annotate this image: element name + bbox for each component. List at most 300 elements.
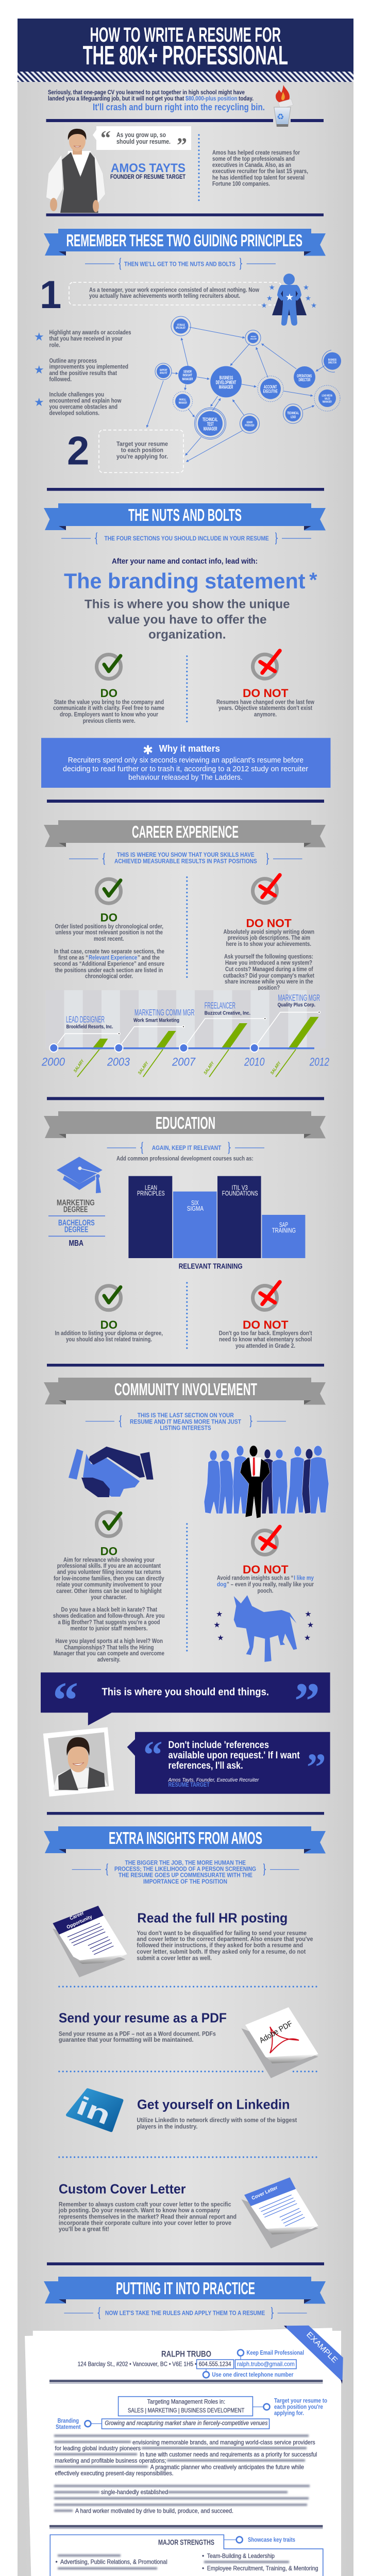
salary slashes: SALARY	[269, 1060, 282, 1075]
icon: Adobe PDF document: Adobe PDF	[258, 2019, 294, 2045]
node: payroll manager	[173, 392, 193, 411]
job: freelancer: Buzzcut Creative, Inc.	[205, 1010, 250, 1016]
bar: ITIL V3 foundations	[217, 1176, 261, 1258]
node: senior producer: PRODUCER	[245, 424, 255, 427]
subheading: nuts and bolts	[85, 258, 276, 269]
job: freelancer: FREELANCER	[205, 1001, 235, 1011]
tip: send as PDF	[59, 2010, 227, 2043]
text block: Amos bio: some of the top professionals and	[212, 155, 295, 162]
do: community involvement: DO	[100, 1545, 117, 1557]
node: support analyst	[155, 363, 172, 380]
major strengths box: •	[202, 2565, 204, 2572]
job: marketing manager	[278, 993, 320, 1008]
tip: get on LinkedIn: players in the industry.	[137, 2123, 197, 2130]
subheading: last section: THIS IS THE LAST SECTION ON YOUR	[138, 1412, 234, 1419]
person silhouette: far right	[309, 1446, 329, 1514]
quote banner: end things: This is where you should end things.	[102, 1687, 269, 1698]
intro text: today.	[239, 95, 254, 102]
subheading: measurable results	[69, 851, 302, 865]
subheading: keep it relevant: AGAIN, KEEP IT RELEVANT	[152, 1144, 222, 1151]
do not: career experience: DO NOT	[246, 917, 292, 929]
timeline years: 2003	[107, 1055, 130, 1068]
do not: community involvement: DO NOT	[243, 1563, 289, 1576]
node: technical test manager: MANAGER	[204, 427, 217, 432]
callout: principle 2	[99, 430, 183, 472]
targeting box: applying for.	[274, 2409, 304, 2416]
list: degrees: DEGREE	[63, 1206, 88, 1214]
do: career experience: In that case, create two separate sections, the	[54, 947, 164, 955]
do not: education	[219, 1282, 312, 1349]
banner: community involvement: COMMUNITY INVOLVEMENT	[114, 1380, 257, 1399]
node: project manager: PROJECT	[251, 335, 257, 337]
node: senior producer	[240, 414, 260, 433]
timeline years	[41, 1055, 329, 1068]
chart: job network diagram	[147, 316, 341, 462]
do: career experience: DO	[100, 911, 117, 924]
subheading: apply the rules	[64, 2308, 307, 2319]
banner: education	[44, 1111, 326, 1139]
icon: cover letter document: Cover Letter	[251, 2185, 279, 2201]
job: lead designer: LEAD DESIGNER	[66, 1014, 105, 1025]
do not: community involvement: dog	[217, 1581, 227, 1588]
quote box: references: references, I'll ask.	[168, 1760, 243, 1771]
banner: extra insights: EXTRA INSIGHTS FROM AMOS	[109, 1828, 262, 1848]
job: marketing comm manager	[133, 1007, 195, 1023]
do: career experience: second as “Additional Experience” and ensure	[54, 960, 164, 968]
node: business development manager: DEVELOPMENT	[216, 380, 236, 386]
icon: graduation cap	[57, 1157, 103, 1193]
icon: burning recycling bin	[274, 85, 293, 127]
photo: polaroid of Amos	[43, 1727, 114, 1797]
intro text	[48, 89, 265, 112]
tip: read the HR posting: submit a cover letter as well.	[137, 1954, 212, 1961]
resume contact line: 124 Barclay St., #202 • Vancouver, BC • V6E 1H5 •	[78, 2361, 197, 2368]
subheading: four sections: THE FOUR SECTIONS YOU SHOULD INCLUDE IN YOUR RESUME	[104, 535, 269, 542]
callout: direct telephone number: Use one direct telephone number	[212, 2371, 294, 2378]
node: senior insight manager	[178, 366, 197, 384]
icon: LinkedIn logo	[68, 2090, 122, 2130]
callout: principle 1: As a teenager, your work experience consisted of almost nothing. Now	[89, 286, 260, 294]
banner: career experience	[44, 820, 326, 847]
summary paragraph: A hard worker motivated by drive to build, produce, and succeed.	[75, 2507, 233, 2514]
salary slashes: SALARY	[72, 1058, 85, 1073]
node: operations director	[294, 366, 315, 388]
bar: six sigma: SIGMA	[187, 1205, 204, 1212]
list: achievement bullets: improvements you implemented	[49, 363, 128, 370]
summary paragraph: for leading global industry pioneers	[55, 2445, 141, 2452]
subheading: measurable results: ACHIEVED MEASURABLE RESULTS IN PAST POSITIONS	[114, 857, 257, 865]
quote box: references: ”	[307, 1746, 326, 1789]
back sheet	[25, 2328, 348, 2576]
person silhouette: left woman	[204, 1450, 224, 1514]
subheading: last section: RESUME AND IT MEANS MORE THAN JUST	[130, 1418, 242, 1425]
text block: Amos bio: Amos has helped create resumes for	[212, 149, 300, 156]
node: technical lead	[283, 404, 303, 423]
tip: custom cover letter	[58, 2181, 237, 2233]
timeline years: 2010	[244, 1055, 265, 1068]
banner: extra insights	[44, 1826, 326, 1854]
do: community involvement: your character.	[91, 1594, 127, 1601]
do: community involvement: Have you played sports at a high level? Won	[56, 1637, 163, 1645]
callout: why it matters: Recruiters spend only six seconds reviewing an applicant's resume before	[68, 756, 303, 765]
do: community involvement: Do you have a black belt in karate? That	[61, 1606, 157, 1613]
subheading: four sections	[61, 533, 311, 544]
do: career experience: first one as “	[58, 954, 88, 961]
do: career experience: Relevant Experience	[89, 954, 138, 961]
do not: branding statement: anymore.	[254, 711, 277, 718]
do: community involvement: a Big Brother? That suggests you're a good	[58, 1618, 160, 1625]
node: technical test manager	[195, 408, 226, 439]
quote box: references: Amos Tayts, Founder, Executive Recruiter	[168, 1777, 259, 1783]
tip: send as PDF: Send your resume as a PDF – not as a Word document. PDFs	[59, 2030, 216, 2037]
do not: career experience: Have you introduced a new system?	[225, 959, 312, 967]
banner: guiding principles	[44, 229, 326, 256]
major strengths box: •	[202, 2552, 204, 2560]
timeline background stripes	[46, 990, 326, 1048]
salary slashes	[72, 1017, 318, 1077]
text block: Amos bio: Fortune 100 companies.	[212, 180, 270, 188]
subheading: bigger the job: IMPORTANCE OF THE POSITION	[143, 1878, 227, 1885]
heading: branding statement: *	[309, 569, 317, 591]
icon: caped hero with stars	[261, 274, 316, 326]
node: lead media sales manager	[314, 385, 340, 411]
subheading: bigger the job: PROCESS; THE LIKELIHOOD OF A PERSON SCREENING	[114, 1866, 256, 1873]
major strengths box: Team-Building & Leadership	[207, 2552, 275, 2560]
summary paragraph	[54, 2435, 317, 2514]
heading: branding statement: The branding statement	[64, 569, 305, 593]
resume rules	[49, 2380, 323, 2576]
node: payroll manager: MANAGER	[179, 401, 187, 404]
summary paragraph: marketing and profitable business operations;	[55, 2457, 166, 2464]
resume name: RALPH TRUBO	[161, 2349, 211, 2359]
do not: education: need to know what elementary school	[219, 1336, 312, 1343]
timeline years: 2012	[309, 1055, 329, 1068]
icon: dog with stars	[214, 1595, 313, 1662]
bar: six sigma	[173, 1192, 217, 1258]
node: business director: DIRECTOR	[328, 362, 336, 365]
do not: community involvement: I like my	[294, 1574, 314, 1582]
job: freelancer	[205, 1001, 250, 1016]
chart: relevant training bars	[128, 1176, 305, 1270]
tip: read the HR posting: cover letter, submit both. If they asked only for a resume, do not	[137, 1948, 306, 1955]
node: senior insight manager: INSIGHT	[182, 373, 192, 378]
subheading: bigger the job	[72, 1859, 299, 1885]
tip: custom cover letter: you'll be a great fit!	[59, 2226, 109, 2233]
do not: career experience: Ask yourself the following questions:	[224, 953, 313, 960]
summary paragraph: A pragmatic planner who creatively anticipates the future while	[150, 2463, 304, 2470]
major strengths box: MAJOR STRENGTHS	[158, 2538, 214, 2547]
node: business development manager	[210, 366, 242, 397]
node: technical test manager: TECHNICAL	[203, 417, 217, 422]
node: operations director: DIRECTOR	[299, 378, 311, 382]
intro text: $80,000-plus position	[185, 95, 238, 102]
major strengths box: Employee Recruitment, Training, & Mentoring	[207, 2565, 318, 2572]
node: lead media sales manager: MANAGER	[323, 400, 332, 403]
text block: unique value	[85, 598, 290, 642]
callout: principle 2: to each position	[121, 447, 163, 454]
timeline points	[49, 1044, 259, 1052]
do not: career experience	[223, 875, 314, 991]
text block: Amos bio: executives in Canada. Also, as an	[212, 161, 291, 168]
job: marketing comm manager: Work Smart Marketing	[133, 1017, 179, 1023]
speech bubble: quote	[93, 126, 191, 157]
callout: why it matters: behaviour released by The Ladders.	[128, 773, 243, 782]
text block: unique value: organization.	[148, 628, 226, 642]
do: branding statement: drop. Employers want to know who your	[60, 711, 158, 718]
do: branding statement: communicate it with clarity. Feel free to name	[53, 704, 164, 711]
banner: nuts and bolts: THE NUTS AND BOLTS	[128, 505, 242, 524]
list: achievement bullets: followed.	[49, 376, 72, 383]
callout: direct telephone number	[203, 2369, 294, 2378]
icon: burning recycling bin: ♻	[277, 112, 284, 122]
node: lead media sales manager: SALES	[325, 398, 330, 401]
do: community involvement	[53, 1512, 165, 1663]
callout: principle 2: Target your resume	[116, 440, 168, 448]
node: account executive	[258, 376, 283, 402]
node: operations director: OPERATIONS	[297, 374, 312, 378]
text block: unique value: This is where you show the unique	[85, 598, 290, 612]
node: support analyst: SUPPORT	[160, 369, 167, 372]
portrait: Amos Tayts	[46, 129, 105, 213]
callout: why it matters: deciding to read further or to trash it, according to a 2012 study on recruiter	[63, 765, 308, 773]
speech bubble: quote: ”	[177, 133, 187, 157]
speech bubble: quote: As you grow up, so	[116, 131, 166, 139]
do: education: In addition to listing your diploma or degree,	[55, 1329, 163, 1336]
bar: lean principles	[128, 1176, 172, 1258]
quote box: references: “	[143, 1734, 163, 1776]
branding statement box: Branding	[58, 2417, 79, 2425]
callout: principle 1: you actually have achievements worth telling recruiters about.	[89, 292, 240, 299]
do: branding statement: DO	[100, 687, 117, 700]
do: branding statement	[53, 654, 164, 724]
list: degrees: MBA	[69, 1239, 83, 1248]
banner: community involvement	[44, 1378, 326, 1404]
node: business director	[322, 350, 341, 372]
subheading: bigger the job: THE BIGGER THE JOB, THE MORE HUMAN THE	[125, 1859, 246, 1866]
targeting box: each position you're	[274, 2403, 323, 2410]
name: Amos Tayts: AMOS TAYTS	[111, 161, 185, 175]
do not: education: you attended in Grade 2.	[235, 1342, 295, 1349]
node: account executive: EXECUTIVE	[263, 389, 278, 395]
speech bubble: quote: should your resume.	[116, 138, 171, 145]
list: achievement bullets: Outline any process	[49, 357, 97, 364]
list: achievement bullets: Include challenges you	[49, 391, 104, 398]
do: community involvement: for low-income families, then you can directly	[54, 1574, 164, 1582]
do not: career experience: previous job descriptions. The aim	[228, 934, 310, 941]
banner: nuts and bolts	[44, 503, 326, 531]
salary slashes: SALARY	[203, 1060, 215, 1075]
job: lead designer	[66, 1014, 113, 1030]
do not: career experience: position?	[258, 984, 280, 991]
intro text: landed you a lifeguarding job, but it will not get you that	[48, 95, 184, 102]
do: education	[55, 1286, 163, 1343]
node: senior insight manager: SENIOR	[183, 369, 192, 374]
list: achievement bullets	[35, 329, 131, 417]
branding statement box	[56, 2417, 269, 2430]
quote box: references: available upon request.' If I want	[168, 1750, 300, 1761]
tip: read the HR posting: You don't want to be disqualified for failing to send your resume	[137, 1929, 307, 1937]
do: community involvement: mentor to junior staff members.	[70, 1625, 147, 1632]
do: career experience: unless your most relevant position is not the	[56, 929, 163, 936]
tip: read the HR posting: and cover letter to the correct department. Also ensure that you've	[137, 1936, 313, 1943]
do: career experience: most recent.	[94, 935, 124, 942]
chart: career timeline	[41, 990, 329, 1077]
subheading: last section	[86, 1412, 286, 1432]
divider top	[46, 119, 324, 122]
quote banner: end things: “	[53, 1671, 78, 1728]
tip: custom cover letter: incorporate their corporate culture into your cover letter to prove	[59, 2219, 231, 2227]
quote box: references	[127, 1732, 330, 1794]
summary paragraph: envisioning memorable brands, and managing world-class service providers	[132, 2438, 315, 2446]
targeting box: Targeting Management Roles in:	[147, 2398, 225, 2405]
node: payroll manager: PAYROLL	[179, 398, 186, 401]
node: project manager	[245, 330, 261, 346]
central businessman	[240, 1446, 270, 1518]
job: lead designer: Brookfield Resorts, Inc.	[66, 1024, 113, 1030]
subheading: bigger the job: THE RESUME GOES UP COMMENSURATE WITH THE	[119, 1872, 252, 1879]
bar: lean principles: PRINCIPLES	[137, 1190, 165, 1197]
intro text: It'll crash and burn right into the recycling bin.	[93, 102, 265, 112]
person silhouette: second woman	[218, 1450, 234, 1514]
do not: career experience: cutbacks? Did your company's market	[223, 972, 314, 979]
name: Amos Tayts: FOUNDER OF RESUME TARGET	[110, 174, 185, 180]
node: business development manager: BUSINESS	[220, 375, 233, 381]
list: degrees: BACHELORS	[58, 1218, 95, 1227]
tip: get on LinkedIn: Utilize LinkedIn to network directly with some of the biggest	[137, 2116, 297, 2124]
do not: branding statement: DO NOT	[243, 687, 289, 700]
name: Amos Tayts	[110, 161, 185, 180]
salary slashes: SALARY	[137, 1060, 149, 1075]
list: achievement bullets: developed solutions.	[49, 410, 99, 417]
bar: ITIL V3 foundations: FOUNDATIONS	[222, 1190, 258, 1197]
text: courses intro: Add common professional development courses such as:	[116, 1155, 254, 1162]
node: storage specialist: SPECIALIST	[176, 327, 185, 330]
summary paragraph: single-handedly established	[101, 2488, 168, 2496]
node: senior insight manager: MANAGER	[182, 377, 193, 381]
do: career experience: ” and the	[138, 954, 160, 961]
do not: branding statement	[216, 651, 315, 718]
bar: SAP training	[262, 1215, 305, 1258]
summary paragraph: In tune with customer needs and requirements as a priority for successful	[140, 2451, 317, 2458]
do not: career experience: share increase while you were in the	[225, 978, 313, 985]
callout: why it matters	[41, 738, 331, 788]
icon: career opportunity document	[53, 1906, 127, 1977]
tip: read the HR posting: Read the full HR posting	[137, 1910, 288, 1925]
callout: why it matters: ✱	[143, 743, 153, 757]
do: community involvement: Manager that you can compete and overcome	[54, 1650, 164, 1657]
do not: branding statement: years. Objective statements don't exist	[218, 704, 312, 711]
list: achievement bullets: you overcame obstacles and	[49, 403, 117, 410]
tip: custom cover letter: Remember to always custom craft your cover letter to the specific	[59, 2200, 231, 2208]
node: senior producer: SENIOR	[246, 421, 252, 424]
resume contact line	[78, 2360, 296, 2369]
do not: career experience: here is to show your achievements.	[226, 940, 311, 947]
text block: Amos bio: executive recruiter for the last 15 years,	[212, 167, 308, 175]
bar: SAP training: SAP	[279, 1222, 288, 1229]
callout: principle 2: you're applying for.	[116, 453, 168, 460]
node: technical lead: LEAD	[291, 414, 296, 419]
do: community involvement: and you volunteer filing income tax returns	[57, 1568, 161, 1575]
quote box: references: Don't include 'references	[168, 1740, 269, 1751]
person silhouette: third	[233, 1446, 249, 1514]
do not: branding statement: Resumes have changed over the last few	[216, 699, 315, 706]
node: account executive: ACCOUNT	[264, 384, 277, 390]
intro text: Seriously, that one-page CV you learned to put together in high school might have	[48, 89, 245, 96]
node: business development manager: MANAGER	[219, 385, 233, 391]
targeting box: SALES | MARKETING | BUSINESS DEVELOPMENT	[128, 2407, 245, 2414]
do not: community involvement: Avoid random insights such as “	[217, 1574, 293, 1582]
chart label: RELEVANT TRAINING	[179, 1262, 243, 1270]
person silhouette: tall	[286, 1446, 305, 1514]
icon: cover letter document	[241, 2177, 318, 2248]
tip: send as PDF: guarantee that your formatting will be maintained.	[59, 2036, 194, 2043]
do not: education: DO NOT	[243, 1318, 289, 1331]
icon: group of people	[204, 1446, 329, 1518]
node: technical lead: TECHNICAL	[288, 411, 299, 415]
node: lead media sales manager: LEAD MEDIA	[322, 395, 332, 398]
header: title block	[18, 19, 353, 82]
number 1: 1	[40, 273, 61, 317]
quote box: references: RESUME TARGET	[168, 1782, 210, 1788]
tip: custom cover letter: represents themselves in the market? Read their annual report and	[59, 2213, 237, 2220]
tip: get on LinkedIn	[137, 2097, 297, 2130]
banner: putting it into practice	[44, 2277, 326, 2304]
speech bubble: quote: “	[100, 126, 111, 149]
node: business director: BUSINESS	[328, 359, 336, 362]
text block: Amos bio: he has identified top talent for several	[212, 174, 305, 181]
branding statement box: Statement	[56, 2423, 81, 2430]
do: branding statement: State the value you bring to the company and	[54, 699, 164, 706]
do: education: DO	[100, 1318, 117, 1331]
do: education: you should also list related training.	[66, 1336, 152, 1343]
list: achievement bullets: that you have received in your	[49, 335, 123, 342]
major strengths box: Showcase key traits	[248, 2536, 295, 2543]
do: career experience	[54, 879, 164, 980]
do not: community involvement: pooch.	[258, 1587, 273, 1594]
do: community involvement: career. Other items can be used to highlight	[56, 1587, 162, 1595]
timeline years: 2007	[172, 1055, 196, 1068]
subheading: keep it relevant	[107, 1142, 264, 1154]
banner: education: EDUCATION	[156, 1113, 215, 1132]
bar: six sigma: SIX	[191, 1199, 199, 1207]
subheading: apply the rules: NOW LET'S TAKE THE RULES AND APPLY THEM TO A RESUME	[105, 2309, 265, 2316]
callout: principle 1	[69, 282, 281, 305]
text block: unique value: value you have to offer the	[108, 613, 267, 627]
leader lines	[58, 1012, 319, 1044]
do: career experience: Order listed positions by chronological order,	[55, 923, 163, 930]
job: marketing manager: Quality Plus Corp.	[278, 1002, 315, 1008]
banner: career experience: CAREER EXPERIENCE	[132, 822, 239, 841]
icon: LinkedIn logo: in	[73, 2091, 115, 2130]
list: achievement bullets: role.	[49, 341, 60, 348]
quote banner: end things	[41, 1671, 330, 1730]
person silhouette: arm raised	[272, 1449, 288, 1514]
branding statement box: Growing and recapturing market share in fiercely-competitive venues	[105, 2419, 267, 2427]
example corner ribbon	[284, 2326, 343, 2384]
node: project manager: MANAGER	[250, 338, 257, 340]
subheading: nuts and bolts: THEN WE'LL GET TO THE NUTS AND BOLTS	[124, 261, 235, 268]
targeting box	[119, 2397, 327, 2416]
list: achievement bullets: and the positive results that	[49, 369, 117, 377]
timeline years: 2000	[41, 1055, 65, 1068]
tip: custom cover letter: Custom Cover Letter	[59, 2181, 186, 2197]
job: marketing manager: MARKETING MGR	[278, 993, 320, 1003]
resume contact line: ralph.trubo@gmail.com	[237, 2361, 295, 2368]
node: storage specialist	[171, 316, 191, 336]
example corner ribbon: EXAMPLE	[305, 2330, 339, 2365]
person silhouette: navy right	[302, 1449, 315, 1514]
list: achievement bullets: encountered and explain how	[49, 397, 122, 404]
